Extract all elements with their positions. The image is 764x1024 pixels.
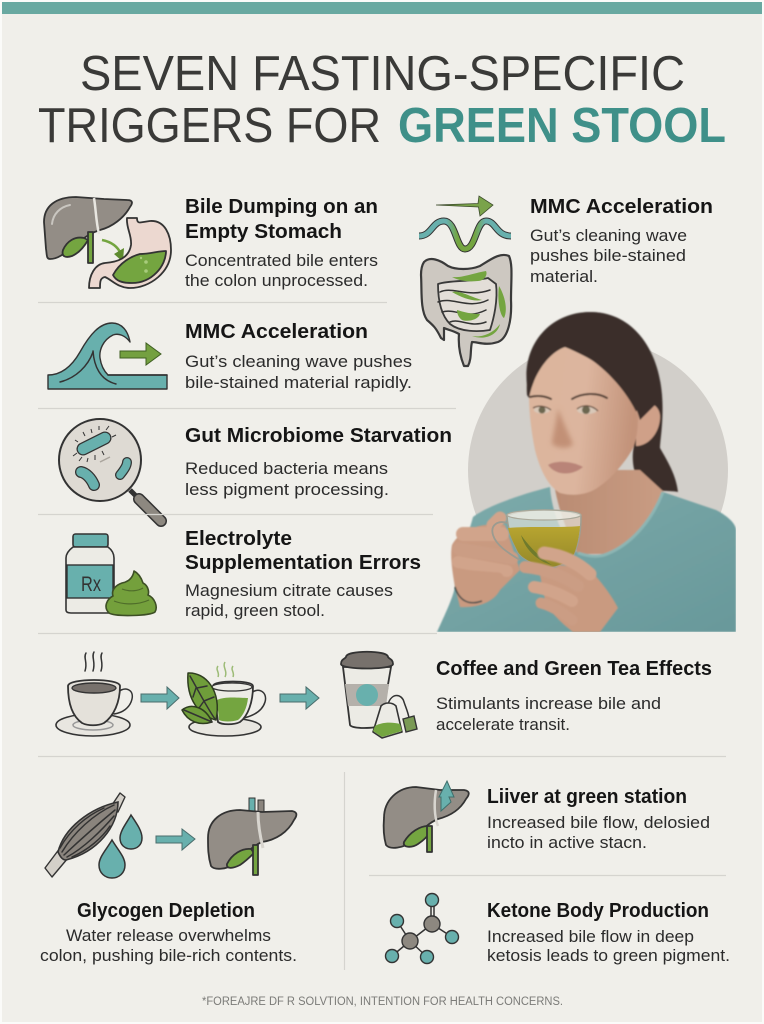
text: bile dumping: Bile Dumping on an [185, 196, 378, 218]
ear [636, 403, 660, 446]
icon: Rx bottle and green stool [66, 534, 156, 616]
icon: Rx bottle and green stool: Rx [81, 573, 101, 596]
text: electrolyte errors: Supplementation Errors [185, 552, 421, 574]
panel: ketone body production [386, 894, 730, 965]
text: gut microbiome [185, 425, 452, 499]
icon: muscle and water drops [45, 793, 142, 878]
text: liver at green station: incto in active stacn. [487, 834, 647, 852]
text: liver at green station: Increased bile flow, delosied [487, 814, 710, 832]
text: MMC acceleration: Gut’s cleaning wave pushes [185, 353, 412, 371]
panel: MMC acceleration right [419, 196, 713, 366]
icon: green tea cup with leaves [182, 662, 266, 736]
neck [552, 470, 664, 554]
hair back and ponytail [526, 312, 678, 492]
icon: liver with up arrow [384, 781, 469, 852]
glass cup of tea [492, 510, 581, 567]
text: coffee and green tea: accelerate transit. [436, 716, 570, 734]
sweater [437, 487, 736, 632]
arrow: water to liver [156, 829, 195, 850]
icon: magnifying glass with bacteria [59, 419, 161, 521]
icon: ketone molecule [386, 894, 458, 964]
icon: takeaway cup and teabag [341, 652, 417, 738]
text: glycogen depletion: Water release overwhelms [66, 927, 271, 945]
title: TRIGGERS FOR [38, 99, 381, 153]
icon: liver and stomach [44, 197, 171, 288]
lips [548, 462, 583, 474]
text: MMC acceleration [185, 321, 412, 392]
brows [530, 394, 607, 399]
icon: arrow, wave and intestines [419, 196, 512, 366]
panel: glycogen depletion [40, 793, 297, 965]
panel: gut microbiome [59, 419, 452, 521]
text: electrolyte errors: Electrolyte [185, 528, 292, 550]
icon: liver with gallbladder [208, 798, 296, 875]
text: coffee and green tea [436, 658, 712, 734]
panel: bile dumping [44, 196, 378, 290]
text: coffee and green tea: Stimulants increase bile and [436, 695, 661, 713]
text: bile dumping: the colon unprocessed. [185, 272, 368, 290]
text: bile dumping [185, 196, 378, 290]
text: electrolyte errors: rapid, green stool. [185, 602, 325, 620]
nose [552, 408, 573, 448]
arrow: coffee to tea [141, 687, 179, 709]
text: gut microbiome: Reduced bacteria means [185, 460, 388, 478]
text: ketone body production [487, 900, 730, 965]
panel: electrolyte errors [66, 528, 421, 620]
woman [437, 312, 736, 632]
text: glycogen depletion: colon, pushing bile-rich contents. [40, 947, 297, 965]
panel: photo of woman drinking tea [437, 312, 736, 632]
text: MMC acceleration: MMC Acceleration [185, 321, 368, 343]
backdrop circle [468, 351, 728, 555]
text: ketone body production: Ketone Body Production [487, 900, 709, 922]
text: electrolyte errors [185, 528, 421, 620]
right hand holding cup [525, 553, 618, 632]
text: gut microbiome: Gut Microbiome Starvation [185, 425, 452, 447]
title [38, 47, 726, 153]
hair front strands [527, 312, 662, 420]
text: coffee and green tea: Coffee and Green Tea Effects [436, 658, 712, 680]
text: gut microbiome: less pigment processing. [185, 481, 389, 499]
text: ketone body production: ketosis leads to green pigment. [487, 947, 730, 965]
text: electrolyte errors: Magnesium citrate causes [185, 582, 393, 600]
footer disclaimer: *FOREAJRE DF R SOLVTION, INTENTION FOR HEALTH CONCERNS. [202, 996, 563, 1008]
face [529, 347, 638, 495]
eyes [534, 406, 550, 414]
text: MMC acceleration: bile-stained material rapidly. [185, 374, 412, 392]
left hand behind cup [451, 518, 520, 607]
title: GREEN STOOL [398, 99, 726, 153]
panel: MMC acceleration left [48, 321, 412, 392]
top accent bar [2, 2, 762, 14]
text: liver at green station [487, 786, 710, 852]
icon: coffee cup [56, 652, 132, 736]
text: ketone body production: Increased bile flow in deep [487, 928, 694, 946]
text: liver at green station: Liiver at green station [487, 786, 687, 808]
panel: liver at green station [384, 781, 710, 852]
icon: wave and arrow [48, 323, 167, 389]
text: MMC acceleration right: MMC Acceleration [530, 196, 713, 218]
text: bile dumping: Empty Stomach [185, 221, 342, 243]
text: MMC acceleration right [530, 196, 713, 286]
panel: coffee and green tea [56, 652, 712, 738]
text: bile dumping: Concentrated bile enters [185, 252, 378, 270]
text: glycogen depletion [40, 900, 297, 965]
text: MMC acceleration right: material. [530, 268, 598, 286]
text: MMC acceleration right: Gut’s cleaning wave [530, 227, 687, 245]
arrow: tea to takeaway cup [280, 687, 319, 709]
text: glycogen depletion: Glycogen Depletion [77, 900, 255, 922]
text: MMC acceleration right: pushes bile-stained [530, 247, 686, 265]
title: SEVEN FASTING-SPECIFIC [80, 47, 685, 101]
